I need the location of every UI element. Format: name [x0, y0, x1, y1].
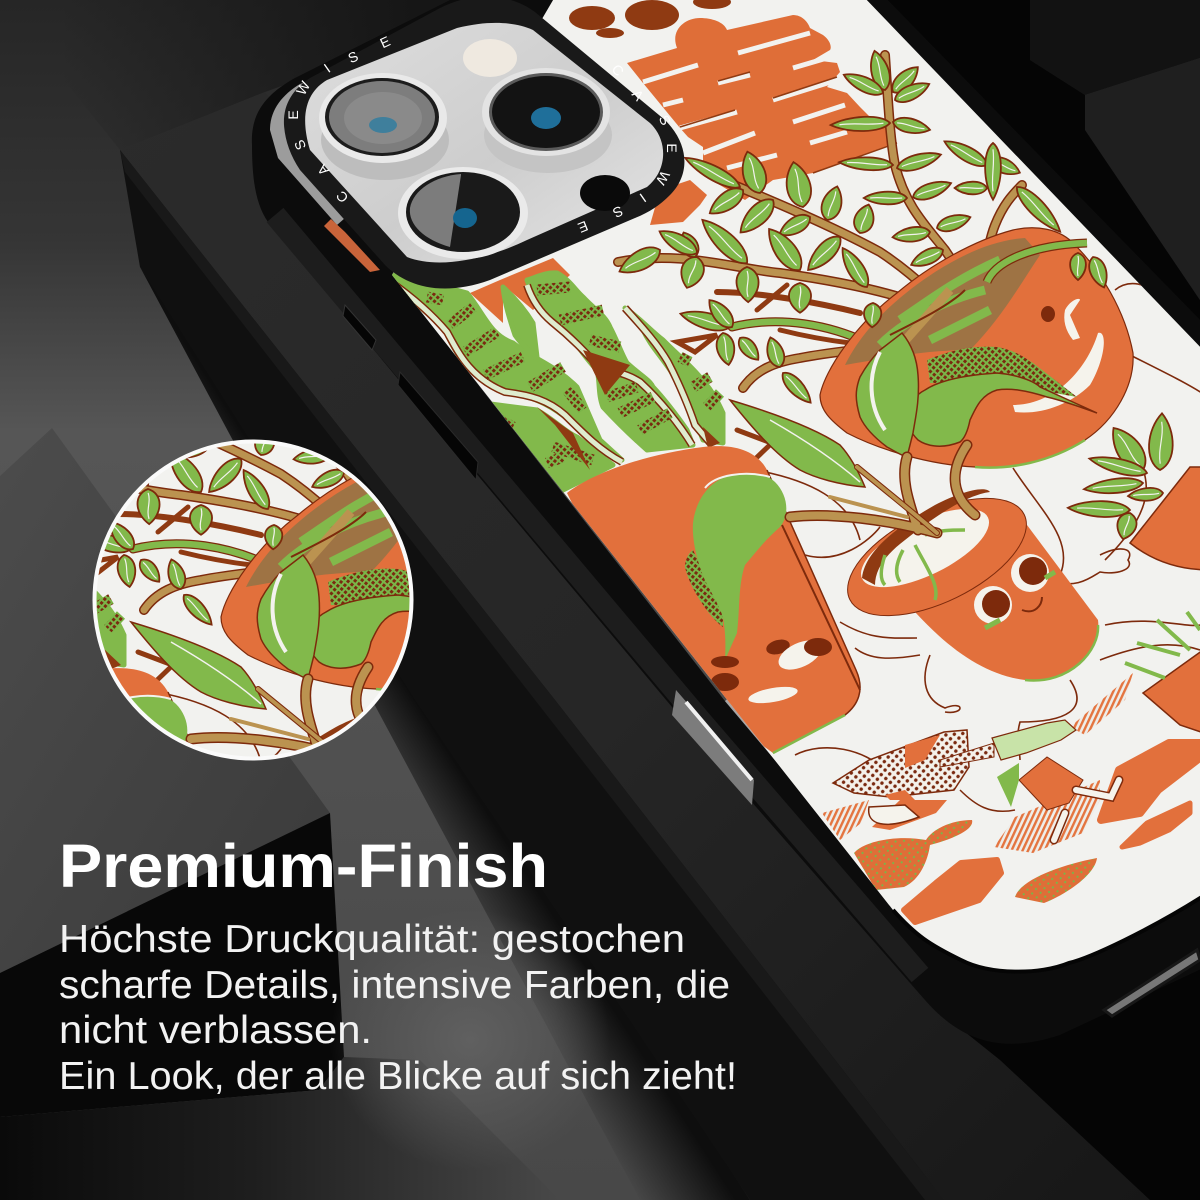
CASEWISE ring lettering: A: [629, 86, 648, 104]
snake plant: [373, 258, 723, 490]
lidar sensor: [580, 175, 630, 211]
stems: [618, 55, 1022, 462]
CASEWISE ring lettering: E: [285, 110, 301, 120]
volume button: [398, 372, 478, 480]
CASEWISE ring lettering: E: [576, 218, 590, 236]
CASEWISE ring lettering: C: [333, 188, 351, 206]
phone case body: [252, 0, 1200, 1044]
green stem over pot: [987, 243, 1087, 282]
description text: Ein Look, der alle Blicke auf sich zieht!: [59, 1055, 737, 1098]
side button: [672, 690, 754, 805]
CASEWISE ring lettering: S: [610, 203, 626, 221]
thin outlines: [755, 284, 1200, 770]
CASEWISE ring lettering: A: [313, 161, 332, 179]
upper pot: [820, 228, 1133, 468]
CASEWISE ring lettering: S: [291, 137, 309, 153]
lens top right: [482, 68, 612, 173]
phone print artwork: [373, 0, 1200, 995]
CASEWISE ring lettering: E: [377, 33, 393, 51]
lower plant long leaves: [730, 400, 865, 487]
lens top left: [319, 73, 449, 180]
detail magnifier circle: [92, 440, 414, 760]
green stem fill: [987, 243, 1087, 282]
CASEWISE ring lettering: S: [656, 112, 674, 128]
CASEWISE ring lettering: W: [293, 78, 314, 98]
clear rim: [270, 80, 345, 225]
heading: Premium-Finish: [59, 832, 548, 900]
CASEWISE ring lettering: C: [609, 61, 627, 79]
lens bottom: [398, 167, 528, 259]
orange character: [627, 15, 897, 225]
stems into pot: [790, 445, 975, 533]
CASEWISE ring lettering: [285, 33, 680, 236]
small pots right: [1068, 413, 1200, 735]
description text: nicht verblassen.: [59, 1009, 372, 1052]
middle pot: [830, 474, 1098, 680]
CASEWISE ring lettering: S: [345, 48, 361, 66]
CASEWISE ring lettering: I: [321, 60, 333, 76]
floor patches: [822, 673, 1200, 922]
CASEWISE ring lettering: E: [664, 143, 680, 153]
description text: scharfe Details, intensive Farben, die: [59, 964, 730, 1007]
walking figure with board: [833, 720, 1119, 840]
charging port: [1104, 950, 1200, 1016]
camera island: [270, 0, 684, 289]
flash: [463, 39, 517, 77]
big pot: [567, 446, 860, 753]
description text: Höchste Druckqualität: gestochen: [59, 918, 685, 961]
description text: [59, 918, 737, 1098]
CASEWISE ring lettering: I: [637, 190, 649, 206]
brush lettering top: [569, 0, 731, 38]
mute switch: [343, 305, 376, 350]
plant leaves: [615, 49, 1111, 407]
CASEWISE ring lettering: W: [652, 168, 673, 188]
lens window: [305, 23, 663, 262]
screen inner rim: [893, 895, 1200, 972]
